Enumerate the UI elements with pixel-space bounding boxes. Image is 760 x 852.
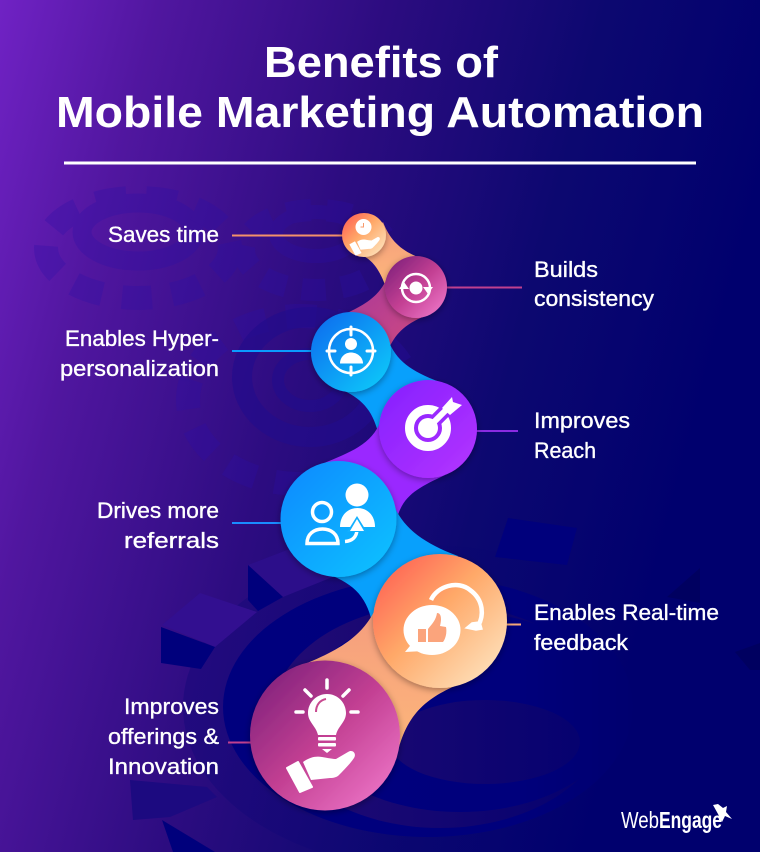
flowing connectors	[300, 222, 462, 760]
item: Drives more referrals: Drives more	[97, 498, 219, 523]
icon: clock on hand	[350, 219, 380, 255]
item: Builds consistency	[385, 256, 654, 318]
item: Enables Hyper-personalization	[60, 312, 391, 392]
item: Builds consistency: Builds	[534, 257, 598, 282]
background gears	[46, 198, 760, 852]
logo: WebEngage: Engage	[659, 807, 722, 833]
item: Improves offerings & Innovation	[108, 660, 400, 810]
item: Improves offerings & Innovation: Innovation	[108, 754, 219, 779]
item: Enables Hyper-personalization: personalization	[60, 356, 219, 381]
icon: targeted person	[327, 327, 375, 375]
item: Enables Real-time feedback	[373, 554, 719, 688]
icon: cycle arrows	[399, 274, 433, 302]
big gear body	[183, 545, 673, 852]
title	[56, 38, 704, 137]
title: Mobile Marketing Automation	[56, 88, 704, 137]
item: Improves offerings & Innovation: offerings &	[108, 724, 219, 749]
icon: target with arrow	[410, 397, 462, 446]
logo: WebEngage: Web	[621, 807, 659, 833]
item: Improves Reach	[379, 380, 630, 478]
item: Drives more referrals: referrals	[124, 528, 219, 553]
icon: light bulb on hand	[287, 680, 358, 792]
icon: thumbs up feedback	[404, 585, 482, 655]
item: Builds consistency: consistency	[534, 286, 654, 311]
item: Drives more referrals	[97, 461, 396, 577]
item: Enables Real-time feedback: feedback	[534, 630, 629, 655]
item: Enables Real-time feedback: Enables Real-time	[534, 600, 719, 625]
item: Saves time: Saves time	[108, 222, 219, 247]
item: Enables Hyper-personalization: Enables Hyper-	[65, 326, 219, 351]
item: Saves time	[108, 213, 386, 257]
logo: WebEngage	[621, 804, 732, 833]
title: Benefits of	[264, 38, 498, 87]
item: Improves offerings & Innovation: Improves	[124, 694, 219, 719]
item: Improves Reach: Reach	[534, 438, 596, 463]
icon: referral people	[307, 484, 375, 544]
item: Improves Reach: Improves	[534, 408, 630, 433]
